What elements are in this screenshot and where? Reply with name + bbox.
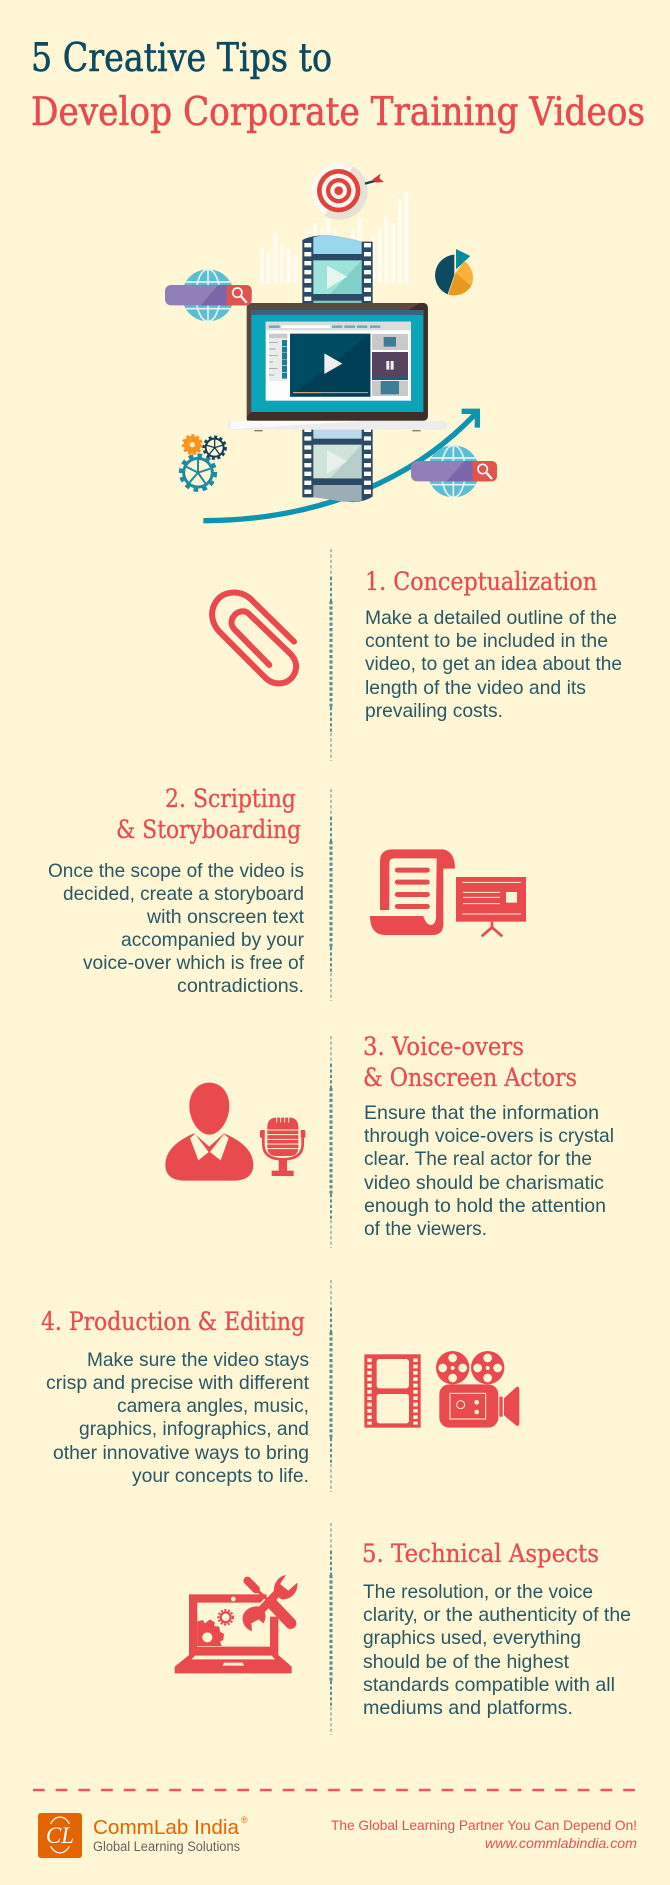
dashed divider 2 [330,789,332,1001]
body text: content to be included in the [365,630,608,652]
logo text: Global Learning Solutions [93,1839,240,1854]
body text: accompanied by your [121,929,304,951]
tagline and website [331,1817,637,1851]
title [31,36,645,135]
tagline and website: www.commlabindia.com [485,1835,637,1851]
icon: film strip and movie camera [364,1351,519,1428]
logo text: CommLab India [93,1816,240,1839]
icon: gears [181,435,226,490]
icon: globe with search bar right [411,445,497,497]
tagline and website: The Global Learning Partner You Can Depend On! [331,1817,637,1833]
body text: contradictions. [177,975,304,997]
heading: 4. Production & Editing [41,1307,305,1336]
logo mark: CL [46,1823,74,1848]
body text: prevailing costs. [365,700,503,722]
logo text: ® [241,1815,248,1825]
body text: camera angles, music, [117,1395,309,1417]
body text: Make sure the video stays [87,1349,309,1371]
heading: & Storyboarding [116,815,301,844]
body text: should be of the highest [363,1651,570,1673]
icon: laptop with gears and tools [175,1575,297,1673]
body text: The resolution, or the voice [363,1581,593,1603]
dashed divider 3 [330,1036,332,1248]
dashed divider 1 [330,549,332,761]
body text: other innovative ways to bring [53,1442,309,1464]
body text: video should be charismatic [364,1172,604,1194]
icon: target with dart [311,163,384,220]
panel: tip 1 conceptualization [212,567,622,722]
body text: with onscreen text [146,906,305,928]
hero illustration: laptop with video player [165,163,497,521]
icon: film strip bottom [302,429,373,502]
heading [363,1032,577,1092]
body text [48,860,305,997]
heading [116,784,301,844]
footer [33,1790,638,1858]
icon: presenter and microphone [165,1083,305,1181]
body text: clear. The real actor for the [364,1148,592,1170]
body text: enough to hold the attention [364,1195,606,1217]
body text [363,1581,631,1719]
body text: Ensure that the information [364,1102,599,1124]
title: 5 Creative Tips to [31,36,332,81]
body text: of the viewers. [364,1218,487,1240]
laptop [227,303,447,431]
icon: script and presentation board [370,849,526,936]
icon: paperclip [212,593,296,683]
body text: graphics used, everything [363,1627,581,1649]
dashed divider 5 [330,1523,332,1735]
logo mark [38,1813,82,1858]
body text: length of the video and its [365,677,586,699]
body text: clarity, or the authenticity of the [363,1604,631,1626]
icon: growth arrow [203,411,477,521]
heading: & Onscreen Actors [363,1063,577,1092]
icon: globe with search bar left [165,269,252,321]
body text: mediums and platforms. [363,1697,573,1719]
body text [365,607,622,722]
body text: standards compatible with all [363,1674,615,1696]
icon: film strip top [302,235,373,303]
body text: your concepts to life. [132,1465,309,1487]
body text: video, to get an idea about the [365,653,622,675]
heading: 2. Scripting [165,784,296,813]
panel: tip 4 production and editing [41,1307,519,1487]
icon: pie chart [435,249,473,295]
heading: 3. Voice-overs [363,1032,524,1061]
body text: Once the scope of the video is [48,860,304,882]
body text [364,1102,614,1240]
body text: through voice-overs is crystal [364,1125,614,1147]
dashed divider 4 [330,1280,332,1492]
body text: decided, create a storyboard [63,883,304,905]
body text: Make a detailed outline of the [365,607,617,629]
body text: graphics, infographics, and [79,1418,309,1440]
panel: tip 5 technical aspects [175,1539,631,1719]
panel: tip 3 voice-overs and onscreen actors [165,1032,614,1240]
panel: tip 2 scripting and storyboarding [48,784,526,997]
body text: voice-over which is free of [83,952,305,974]
heading: 5. Technical Aspects [362,1539,599,1568]
logo text [93,1815,248,1854]
body text [46,1349,310,1487]
bar chart backdrop [260,192,408,283]
body text: crisp and precise with different [46,1372,310,1394]
heading: 1. Conceptualization [365,567,597,596]
